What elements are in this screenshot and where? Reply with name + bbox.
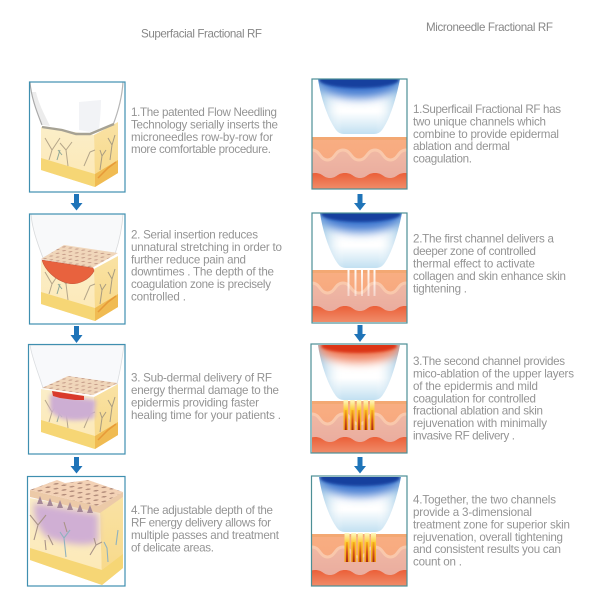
heated needles [344,533,376,562]
arrow: left 2 to 3 [70,326,82,343]
RF energy band [52,391,84,400]
text: right step 4: 4.Together, the two channels [413,494,556,506]
panel: right step 4 [310,475,408,587]
text: left step 4: 4.The adjustable depth of the [131,504,273,517]
text: right step 4: and consistent results you can [413,543,561,556]
arrow: right 1 to 2 [354,194,366,210]
title: Superfacial Fractional RF: Superfacial Fractional RF [141,28,262,40]
skin top surface [41,245,118,268]
text: left step 3 [131,372,281,422]
coagulation zone [42,260,94,284]
icon: handpiece [30,82,123,134]
text: right step 4 [413,494,570,568]
text: left step 1: 1.The patented Flow Needling [131,106,277,119]
skin side edge [30,490,123,513]
arrow: left 1 to 2 [70,194,82,210]
heated needles [344,400,374,430]
text: left step 2: 2. Serial insertion reduces [131,228,258,241]
arrow: left 3 to 4 [70,457,82,474]
text: right step 3 [413,355,574,442]
fat band [30,548,123,585]
icon: translucent handpiece [30,345,124,388]
panel: right step 2 [311,212,408,324]
panel: left step 2 coagulation zone [30,214,125,324]
blood vessels [30,515,102,555]
text: right step 4: rejuvenation, overall tightening [413,531,563,544]
panel: right step 1 [311,78,408,190]
panel: left step 1 handpiece on skin cube [30,82,125,192]
text: right step 2: deeper zone of controlled [413,245,536,258]
text: left step 2: downtimes . The depth of the [131,266,274,279]
thermal zone [34,503,98,545]
text: left step 2: controlled . [131,291,186,304]
text: right step 3: coagulation for controlled [413,392,536,405]
text: left step 3: 3. Sub-dermal delivery of RF [131,372,272,385]
text: right step 1: coagulation. [413,153,472,166]
text: left step 1: microneedles row-by-row for [131,131,273,144]
panel: left step 4 enlarged skin cube [28,476,125,586]
panel: right step 3 [310,343,408,454]
text: left step 3: energy thermal damage to the [131,384,279,397]
text: right step 3: invasive RF delivery . [413,429,515,442]
text: right step 3: fractional ablation and skin [413,405,543,418]
text: left step 1: Technology serially inserts the [131,118,278,131]
text: left step 2: unnatural stretching in order to [131,241,282,254]
text: left step 2 [131,228,282,304]
thermal zone [50,394,96,420]
text: right step 1: ablation and dermal [413,140,510,153]
text: left step 4: multiple passes and treatment [131,529,280,542]
text: right step 3: of the epidermis and mild [413,380,538,393]
text: right step 4: provide a 3-dimensional [413,506,532,519]
icon: handpiece with blue cap [320,214,402,268]
text: right step 2: 2.The first channel delivers a [413,233,555,246]
text: right step 1: 1.Superficail Fractional RF has [413,103,561,116]
text: right step 2: collagen and skin enhance skin [413,270,566,283]
arrow: right 2 to 3 [354,325,366,342]
text: right step 2: tightening . [413,282,467,295]
text: right step 1: combine to provide epidermal [413,128,559,141]
icon: handpiece with blue cap [319,477,401,532]
text: left step 2: coagulation zone is precisely [131,278,271,291]
icon: handpiece with red cap [318,345,400,400]
text: right step 1 [413,103,561,166]
needle channels [37,496,93,513]
icon: handpiece with blue cap [318,80,400,134]
text: right step 2 [413,233,566,295]
text: right step 4: count on . [413,556,462,568]
text: left step 4: of delicate areas. [131,542,214,554]
needles [348,268,376,296]
arrow: right 3 to 4 [354,457,366,474]
text: left step 2: further reduce pain and [131,253,246,266]
text: right step 2: thermal effect to activate [413,258,535,270]
skin top surface [42,376,118,395]
text: left step 4: RF energy delivery allows for [131,516,271,530]
icon: translucent handpiece [31,214,123,258]
title: Microneedle Fractional RF: Microneedle Fractional RF [426,21,553,34]
text: left step 3: epidermis providing faster [131,396,259,410]
skin top surface [30,480,123,506]
text: left step 1 [131,106,278,156]
text: left step 1: more comfortable procedure. [131,143,271,156]
text: right step 4: treatment zone for superior skin [413,518,570,531]
text: right step 3: 3.The second channel provides [413,355,565,368]
panel: left step 3 sub-dermal delivery [28,344,125,454]
text: left step 3: healing time for your patients . [131,409,281,422]
text: right step 3: mico-ablation of the upper layers [413,368,574,380]
text: right step 3: rejuvenation with minimally [413,417,547,430]
text: right step 1: two unique channels which [413,115,546,128]
text: left step 4 [131,504,280,554]
